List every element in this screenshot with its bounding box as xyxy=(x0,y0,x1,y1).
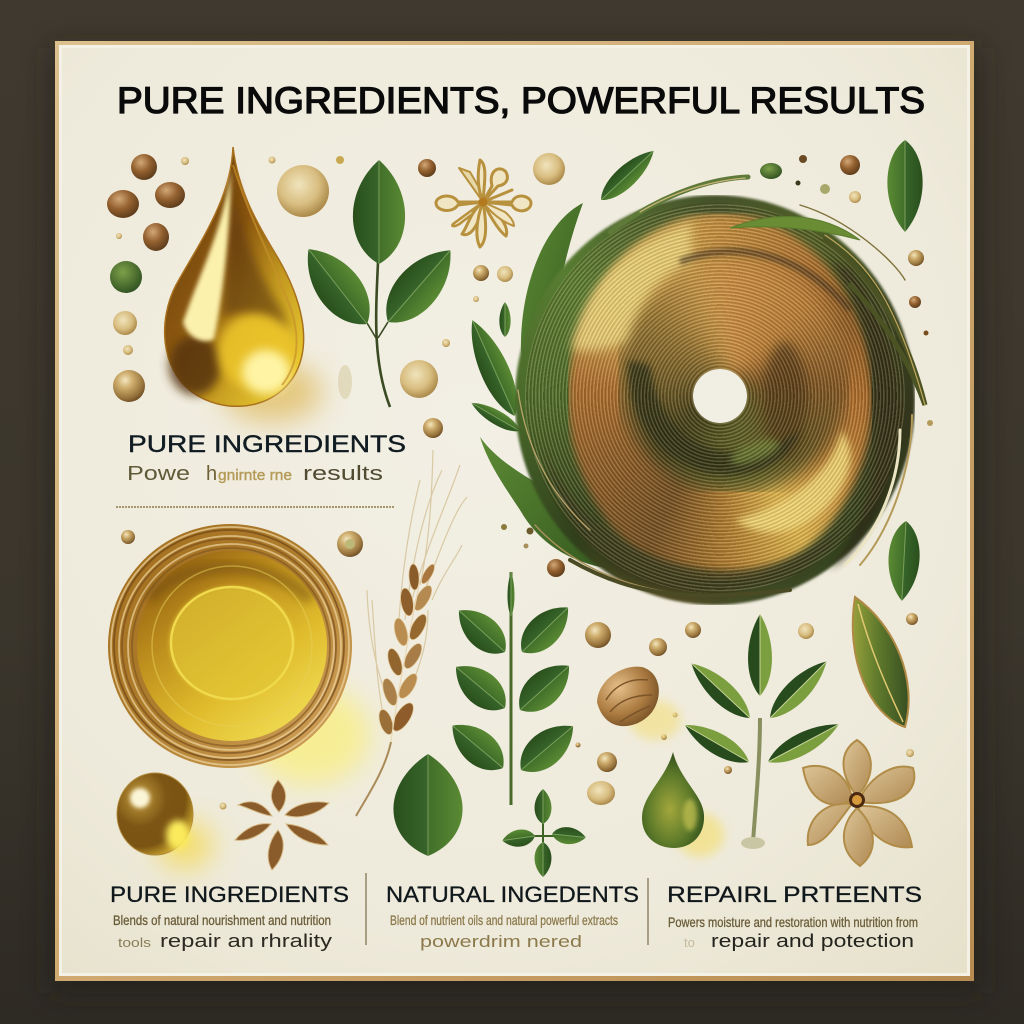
column: pure ingredients: PURE INGREDIENTS xyxy=(110,882,349,907)
spiral: dark lower band xyxy=(545,450,850,592)
sprig: right branch xyxy=(680,614,844,849)
green cross sprig xyxy=(501,789,587,877)
small golden droplet xyxy=(117,773,213,869)
nut xyxy=(597,667,681,740)
brown star flower xyxy=(235,780,329,870)
column: natural ingredients: powerdrim nered xyxy=(420,932,582,951)
column: pure ingredients: tools xyxy=(118,935,152,950)
tan six-petal flower xyxy=(803,740,914,866)
column: pure ingredients: Blends of natural nourishment and nutrition xyxy=(113,912,331,928)
column: pure ingredients xyxy=(110,882,349,951)
column: natural ingredients: Blend of nutrient oils and natural powerful extracts xyxy=(390,912,618,928)
serrated leaf xyxy=(393,754,463,856)
decorative beads, lower area xyxy=(121,524,918,810)
wheat ear xyxy=(356,450,467,816)
spiral: dark right band xyxy=(830,260,898,570)
column: natural ingredients xyxy=(386,882,639,951)
column: repair and protection xyxy=(667,882,922,951)
column: repair and protection: REPAIRL PRTEENTS xyxy=(667,882,922,907)
section label: pure ingredients: gnirnte rne xyxy=(218,467,292,484)
outer green ring xyxy=(515,195,915,605)
hair and leaf swirl xyxy=(459,177,925,605)
section label: pure ingredients: Powe xyxy=(127,463,190,485)
spiral: dark upper arc xyxy=(680,251,850,310)
sprig: central stem with leaf pairs xyxy=(442,572,584,805)
side leaves right of swirl xyxy=(594,140,923,602)
gold-edged leaf xyxy=(853,597,909,727)
fine hair ripples xyxy=(525,203,905,593)
long sweeping leaves around swirl xyxy=(459,203,626,567)
column: repair and protection: to xyxy=(684,935,695,950)
section label: pure ingredients: results xyxy=(303,463,383,485)
title: PURE INGREDIENTS, POWERFUL RESULTS xyxy=(117,80,925,121)
column: repair and protection: Powers moisture and restoration with nutrition from xyxy=(668,914,918,930)
icon: golden oil drop xyxy=(165,147,322,422)
spiral: dark brown near centre xyxy=(763,342,807,458)
spiral: pale gold crescent xyxy=(572,222,693,351)
oil bowl xyxy=(108,524,370,785)
section label: pure ingredients: h xyxy=(206,463,217,485)
column: pure ingredients: repair an rhrality xyxy=(160,931,332,951)
icon: leafy sprig xyxy=(291,160,466,407)
section label: pure ingredients xyxy=(127,431,406,485)
gold hair band xyxy=(568,213,872,581)
section label: pure ingredients: PURE INGREDIENTS xyxy=(128,431,406,458)
decorative beads, upper area xyxy=(107,153,933,438)
column: repair and protection: repair and potection xyxy=(711,931,914,951)
spiral: green glint xyxy=(727,435,783,469)
spiral: gold crescent lower right xyxy=(735,430,850,532)
column: natural ingredients: NATURAL INGEDENTS xyxy=(386,882,639,907)
inner swirl xyxy=(618,262,850,492)
green oil drop xyxy=(642,752,724,857)
centre hole xyxy=(693,369,747,423)
spiral: dark olive band xyxy=(628,360,800,475)
icon: gold flower outline xyxy=(436,160,531,247)
loose strands xyxy=(518,177,925,596)
